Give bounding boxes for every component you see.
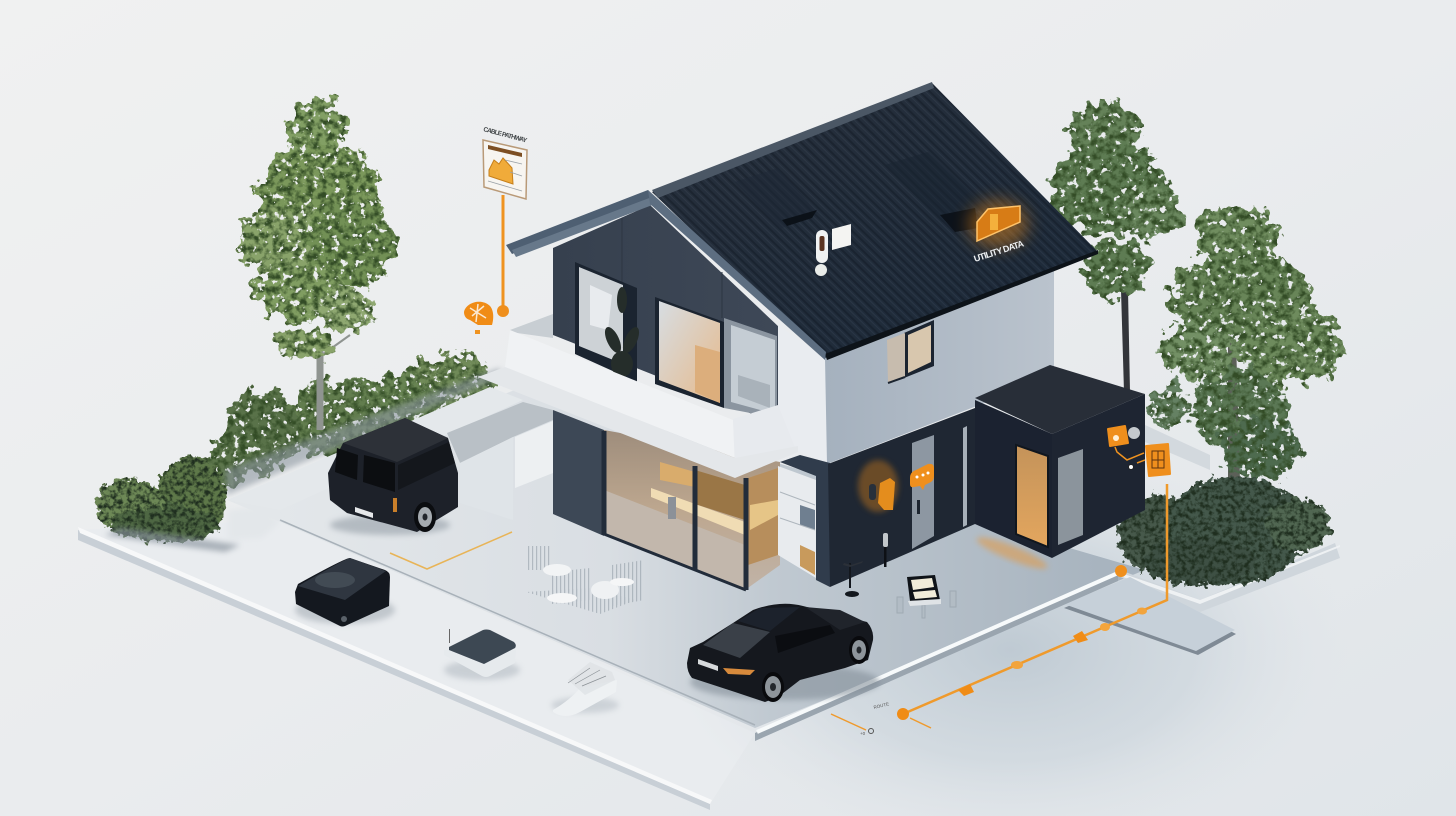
chat bubble icon xyxy=(910,464,934,490)
black van xyxy=(328,418,458,535)
driveway ramp xyxy=(447,402,553,463)
upper grey wall xyxy=(825,270,1054,464)
flat white device xyxy=(551,662,619,716)
soft ground shade xyxy=(0,480,1456,816)
annex window xyxy=(1016,445,1048,547)
right back planter rim xyxy=(1145,425,1210,470)
snow-like pad beside bush xyxy=(228,506,280,540)
black sedan xyxy=(687,604,880,702)
sign board xyxy=(483,140,527,199)
bush base shadow xyxy=(105,528,240,552)
interior floor reflection xyxy=(604,490,745,590)
left front bush xyxy=(96,456,226,542)
trunk xyxy=(290,335,350,430)
doorbell post xyxy=(883,533,888,567)
small road labels: ROUTE xyxy=(873,701,890,710)
trunk xyxy=(1228,340,1240,480)
balcony floor xyxy=(510,314,553,338)
white device xyxy=(444,629,520,680)
entrance door xyxy=(912,435,934,549)
upper window right xyxy=(724,318,777,418)
light strip kerb xyxy=(755,565,1127,741)
road strip and outer kerb xyxy=(78,520,755,810)
orange cable route with nodes xyxy=(831,484,1167,730)
skylights xyxy=(885,152,987,222)
roof caption: UTILITY DATA xyxy=(973,238,1026,264)
kitchen counter xyxy=(651,462,745,535)
trunk xyxy=(1121,290,1130,392)
dark robot device xyxy=(295,558,395,626)
interior right warm xyxy=(748,468,778,565)
glowing lock icon xyxy=(858,460,898,512)
roof camera icon xyxy=(815,224,851,276)
canopy xyxy=(1050,100,1184,298)
sign caption: CABLE PATHWAY xyxy=(482,126,528,145)
annex side face xyxy=(1052,394,1145,558)
parking bay line xyxy=(390,532,512,569)
small wall window xyxy=(887,320,934,383)
hedge row left xyxy=(203,356,496,488)
balcony parapet and slab xyxy=(478,330,798,478)
gable eave fascia xyxy=(506,190,826,360)
patio stool xyxy=(843,561,863,597)
upper window centre xyxy=(655,297,724,408)
porch dark pier xyxy=(780,455,830,587)
small road labels: +0 xyxy=(860,731,866,736)
outdoor tablet kiosk xyxy=(897,575,956,618)
warm floor glow xyxy=(974,532,1050,574)
roof glowing house icon xyxy=(968,200,1028,248)
canopy xyxy=(238,98,396,360)
indoor plant xyxy=(602,287,642,377)
small road labels xyxy=(860,701,890,736)
hedge row base xyxy=(225,368,500,495)
inner edge line xyxy=(280,520,755,725)
annex front face xyxy=(975,400,1052,558)
right tree behind house xyxy=(1050,100,1184,392)
right front tree xyxy=(1154,203,1344,480)
left boundary wall xyxy=(227,387,523,510)
upper gable wall xyxy=(553,205,780,425)
annex grey panel xyxy=(1058,449,1083,545)
upper window left xyxy=(575,262,637,382)
canopy xyxy=(1154,203,1344,480)
house xyxy=(478,82,1145,590)
sign node xyxy=(497,305,509,317)
garage low wall xyxy=(460,421,553,520)
annex roof xyxy=(975,365,1145,434)
ground-floor dark wall xyxy=(828,408,975,587)
left tree xyxy=(238,98,396,430)
ground-floor interior xyxy=(604,430,780,590)
sign pole xyxy=(502,195,504,311)
annex smart icons and connector xyxy=(1108,426,1170,476)
bookshelf xyxy=(778,466,816,578)
right planter bed with bush xyxy=(1118,476,1340,612)
paving slab xyxy=(1064,577,1236,655)
orange brain icon xyxy=(464,302,493,334)
glazing frames xyxy=(604,431,746,590)
white side wall xyxy=(778,325,829,464)
ground-floor dark left wall xyxy=(553,410,604,536)
main roof xyxy=(652,82,1098,360)
lot paving xyxy=(227,388,1145,728)
slim side light xyxy=(963,426,967,527)
patio furniture xyxy=(526,546,644,614)
